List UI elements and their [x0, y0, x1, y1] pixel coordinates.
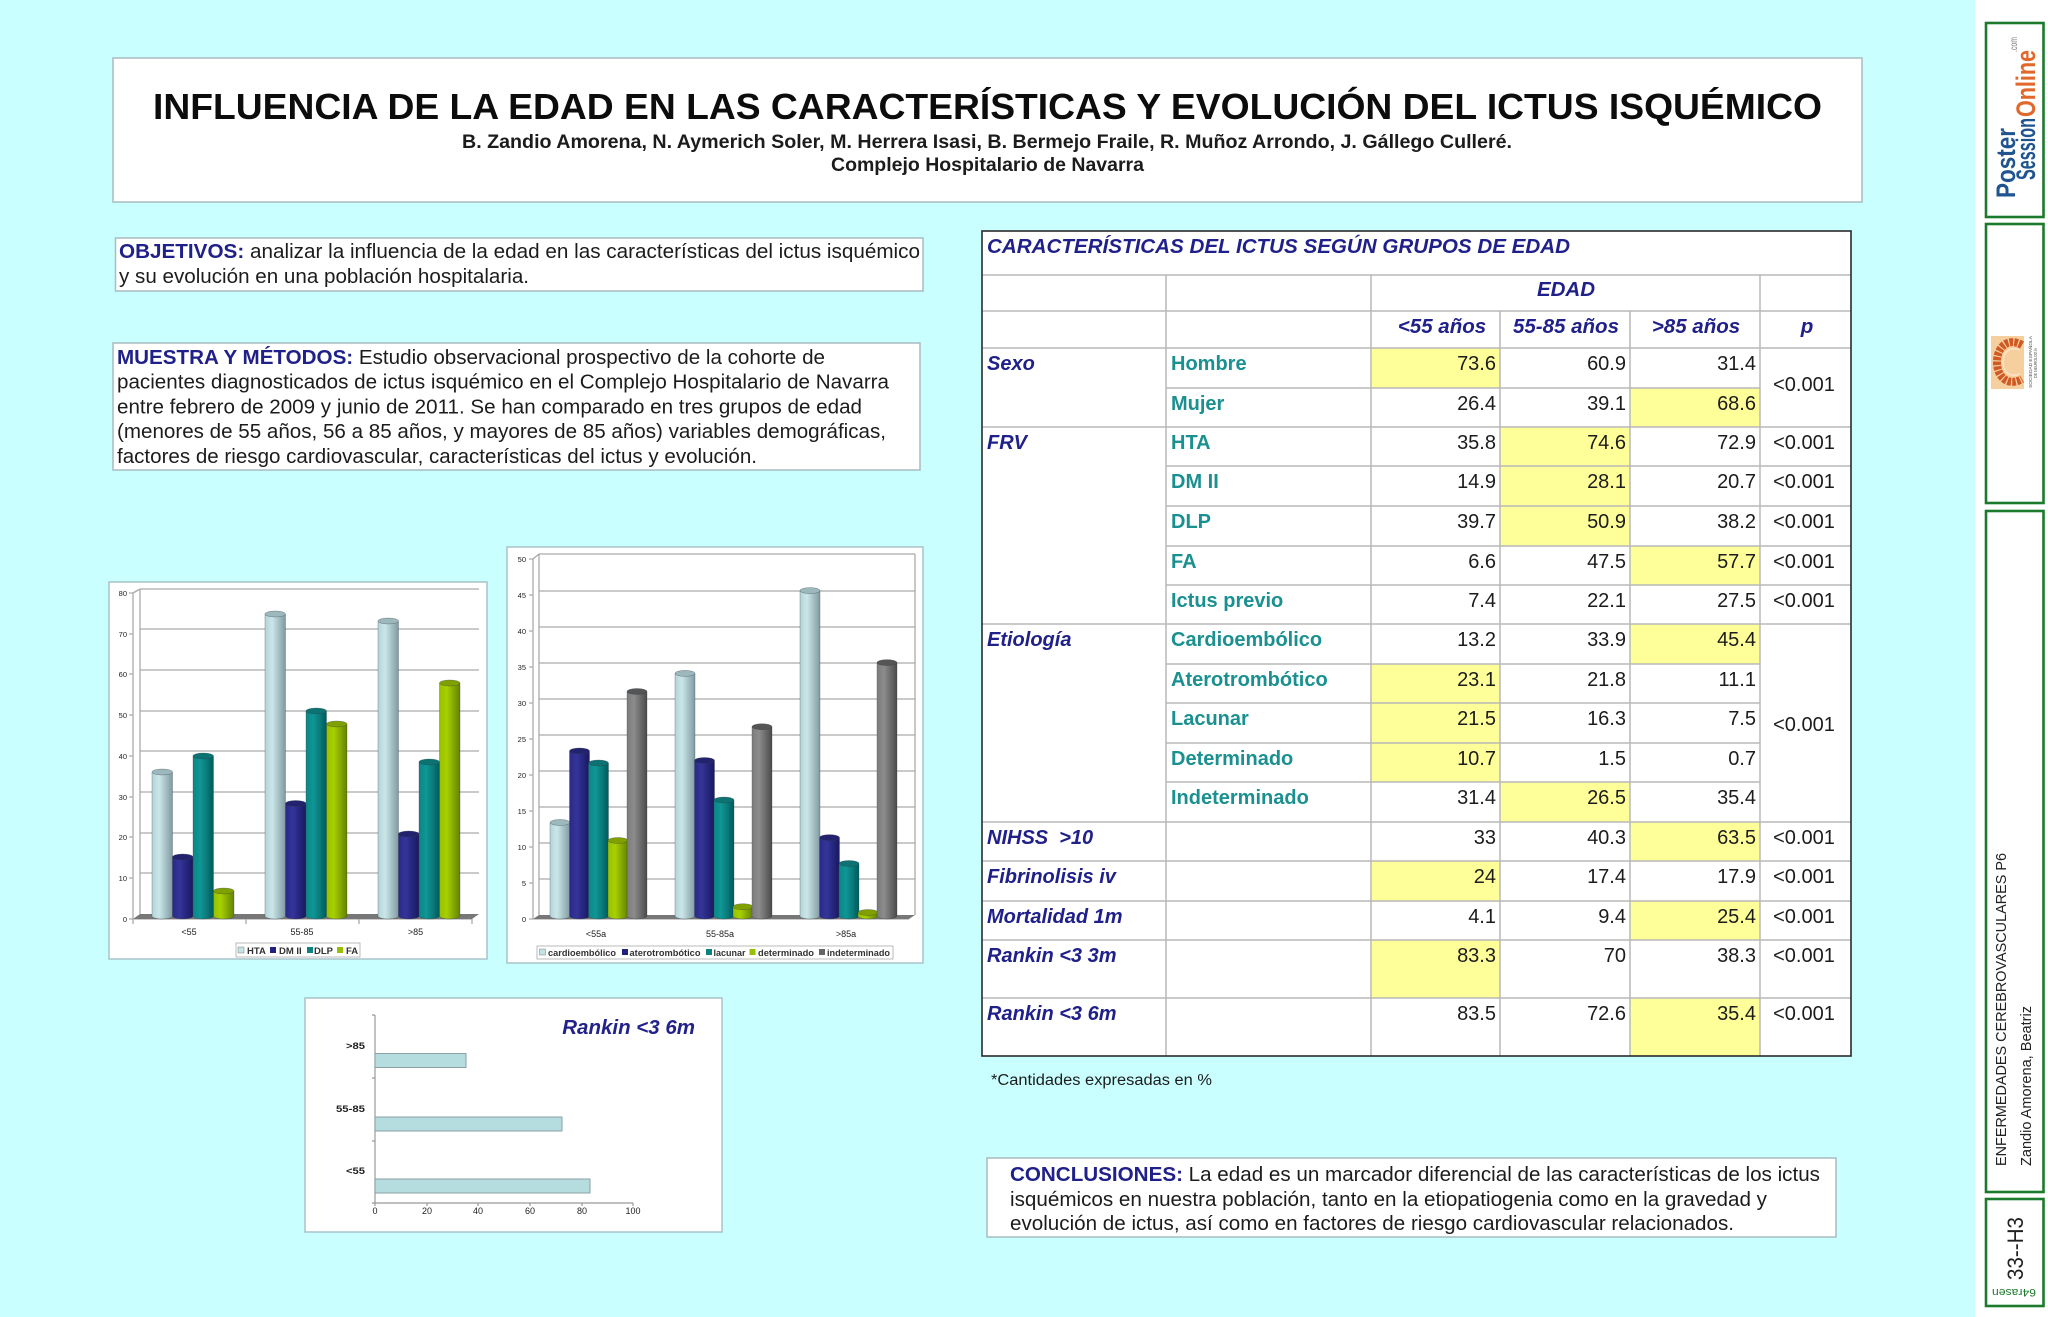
p values: <0.001	[1773, 1003, 1835, 1025]
values <55 años: 21.5	[1457, 708, 1496, 730]
y axis labels: 5	[522, 879, 526, 888]
values >85 años	[1717, 353, 1756, 1025]
bars group >85	[378, 618, 460, 919]
row sub-labels: Determinado	[1171, 748, 1293, 770]
values 55-85 años: 16.3	[1587, 708, 1626, 730]
p values: <0.001	[1773, 432, 1835, 454]
p values: <0.001	[1773, 471, 1835, 493]
legend: lacunar	[714, 948, 746, 959]
panel: muestra y métodos: pacientes diagnosticados de ictus isquémico en el Complejo Hospitalario de Navarra	[117, 370, 890, 394]
values >85 años: 63.5	[1717, 827, 1756, 849]
row sub-labels: HTA	[1171, 432, 1211, 454]
category labels	[336, 1041, 365, 1176]
y axis labels: 20	[119, 833, 127, 842]
table footnote: *Cantidades expresadas en %	[991, 1072, 1212, 1089]
y axis labels: 35	[518, 663, 526, 672]
p values: <0.001	[1773, 827, 1835, 849]
header panel	[113, 58, 1862, 202]
p values: <0.001	[1773, 714, 1835, 736]
category labels: <55a	[586, 929, 606, 939]
category labels: <55	[181, 927, 197, 937]
values 55-85 años: 33.9	[1587, 629, 1626, 651]
chart title: Rankin <3 6m	[562, 1016, 695, 1039]
p values: <0.001	[1773, 866, 1835, 888]
values >85 años: 7.5	[1728, 708, 1756, 730]
values <55 años: 14.9	[1457, 471, 1496, 493]
bars group 55-85a	[675, 670, 772, 919]
values <55 años: 31.4	[1457, 787, 1496, 809]
sidebar box: poster session logo: Session	[2011, 118, 2041, 180]
row sub-labels: DLP	[1171, 511, 1211, 533]
values 55-85 años: 26.5	[1587, 787, 1626, 809]
values <55 años	[1457, 353, 1496, 1025]
column headers: >85 años	[1652, 315, 1740, 338]
y axis labels: 0	[522, 915, 526, 924]
panel: muestra y métodos: MUESTRA Y MÉTODOS: Estudio observacional prospectivo de la cohorte de	[117, 346, 825, 369]
bar chart: Rankin <3 6m	[305, 998, 722, 1232]
column headers: p	[1800, 315, 1813, 338]
sidebar box: session and author	[1986, 511, 2044, 1192]
values <55 años: 23.1	[1457, 669, 1496, 691]
row sub-labels: Aterotrombótico	[1171, 669, 1328, 691]
bar chart: factores de riesgo por edad	[109, 582, 487, 959]
values 55-85 años: 17.4	[1587, 866, 1626, 888]
row group labels: Rankin <3 6m	[987, 1003, 1117, 1025]
sidebar box: poster session logo	[1986, 23, 2044, 217]
values 55-85 años: 39.1	[1587, 393, 1626, 415]
panel: conclusiones: CONCLUSIONES: La edad es un marcador diferencial de las características de los ictus	[1010, 1163, 1820, 1186]
legend: indeterminado	[827, 948, 890, 959]
values >85 años: 11.1	[1719, 669, 1756, 691]
values 55-85 años: 21.8	[1587, 669, 1626, 691]
values 55-85 años	[1587, 353, 1626, 1025]
values >85 años: 38.3	[1717, 945, 1756, 967]
authors: B. Zandio Amorena, N. Aymerich Soler, M. Herrera Isasi, B. Bermejo Fraile, R. Muñoz Arrondo, J. Gállego Culleré.	[462, 132, 1512, 153]
sidebar box: poster code	[1986, 1199, 2044, 1306]
values <55 años: 7.4	[1468, 590, 1496, 612]
y axis labels: 40	[119, 752, 127, 761]
x axis labels: 60	[525, 1206, 535, 1216]
p values: <0.001	[1773, 511, 1835, 533]
column headers: EDAD	[1537, 278, 1595, 301]
values 55-85 años: 72.6	[1587, 1003, 1626, 1025]
row sub-labels: Hombre	[1171, 353, 1247, 375]
panel: objetivos: y su evolución en una población hospitalaria.	[119, 265, 529, 288]
row group labels: Fibrinolisis iv	[987, 866, 1118, 888]
y axis labels	[119, 589, 127, 924]
values >85 años: 38.2	[1717, 511, 1756, 533]
column headers	[1398, 278, 1813, 338]
y axis labels: 10	[518, 843, 526, 852]
bars	[375, 1054, 590, 1193]
row group labels: Rankin <3 3m	[987, 945, 1117, 967]
y axis labels: 30	[119, 793, 127, 802]
panel: muestra y métodos: factores de riesgo cardiovascular, características del ictus y evolución.	[117, 445, 757, 468]
y axis labels: 10	[119, 874, 127, 883]
sidebar box: neurology society logo: DE NEUROLOGÍA	[2033, 348, 2038, 378]
y axis labels: 80	[119, 589, 127, 598]
p values	[1773, 374, 1835, 1025]
values >85 años: 0.7	[1728, 748, 1756, 770]
y axis labels: 60	[119, 670, 127, 679]
values <55 años: 35.8	[1457, 432, 1496, 454]
table title: CARACTERÍSTICAS DEL ICTUS SEGÚN GRUPOS DE EDAD	[987, 234, 1570, 258]
panel: objetivos	[116, 238, 923, 291]
values >85 años: 35.4	[1717, 787, 1756, 809]
panel: objetivos: OBJETIVOS: analizar la influencia de la edad en las características del ictus isquémico	[119, 240, 920, 263]
legend	[537, 946, 893, 959]
highlighted cells	[1371, 348, 1760, 1056]
row sub-labels: Cardioembólico	[1171, 629, 1322, 651]
sidebar box: poster code: 64rasen	[1992, 1286, 2036, 1298]
values 55-85 años: 47.5	[1587, 551, 1626, 573]
row sub-labels: Mujer	[1171, 393, 1225, 415]
panel: conclusiones	[987, 1158, 1836, 1237]
affiliation: Complejo Hospitalario de Navarra	[831, 155, 1144, 176]
values 55-85 años: 22.1	[1587, 590, 1626, 612]
row sub-labels	[1171, 353, 1328, 809]
panel: conclusiones: evolución de ictus, así como en factores de riesgo cardiovascular relacionados.	[1010, 1212, 1734, 1235]
x axis labels: 100	[625, 1206, 641, 1216]
y axis labels: 40	[518, 627, 526, 636]
legend: determinado	[758, 948, 814, 959]
panel: muestra y métodos: (menores de 55 años, 56 a 85 años, y mayores de 85 años) variables demográficas,	[117, 420, 886, 443]
p values: <0.001	[1773, 590, 1835, 612]
values 55-85 años: 28.1	[1587, 471, 1626, 493]
values >85 años: 57.7	[1717, 551, 1756, 573]
values 55-85 años: 50.9	[1587, 511, 1626, 533]
category labels: >85	[346, 1041, 365, 1051]
values <55 años: 24	[1474, 866, 1496, 888]
p values: <0.001	[1773, 551, 1835, 573]
legend: aterotrombótico	[630, 948, 701, 959]
p values: <0.001	[1773, 906, 1835, 928]
legend: DLP	[314, 946, 334, 957]
y axis labels: 45	[518, 591, 526, 600]
values 55-85 años: 9.4	[1598, 906, 1626, 928]
sidebar box: session and author: ENFERMEDADES CEREBROVASCULARES P6	[1994, 853, 2010, 1166]
panel: conclusiones: isquémicos en nuestra población, tanto en la etiopatiogenia como en la gravedad y	[1010, 1188, 1768, 1211]
bars group >85a	[800, 588, 897, 919]
values <55 años: 83.3	[1457, 945, 1496, 967]
panel: muestra y métodos	[113, 343, 920, 470]
bars group 55-85	[265, 611, 347, 919]
legend: cardioembólico	[548, 948, 616, 959]
values >85 años: 25.4	[1717, 906, 1756, 928]
sidebar box: session and author: Zandio Amorena, Beatriz	[2019, 1006, 2035, 1166]
x axis labels: 40	[473, 1206, 483, 1216]
values 55-85 años: 60.9	[1587, 353, 1626, 375]
x axis labels: 0	[372, 1206, 378, 1216]
category labels	[181, 927, 423, 937]
sidebar	[1975, 0, 2048, 1317]
y axis labels	[518, 555, 526, 924]
row sub-labels: FA	[1171, 551, 1197, 573]
category labels: <55	[346, 1166, 365, 1176]
y axis labels: 25	[518, 735, 526, 744]
row group labels: NIHSS >10	[987, 827, 1093, 849]
values >85 años: 20.7	[1717, 471, 1756, 493]
y axis labels: 70	[119, 630, 127, 639]
sidebar box: poster code: 33--H3	[2003, 1217, 2028, 1280]
row group labels: Mortalidad 1m	[987, 906, 1123, 928]
p values: <0.001	[1773, 945, 1835, 967]
y axis labels: 20	[518, 771, 526, 780]
values >85 años: 17.9	[1717, 866, 1756, 888]
legend: DM II	[279, 946, 302, 957]
values >85 años: 35.4	[1717, 1003, 1756, 1025]
legend: FA	[346, 946, 358, 957]
values <55 años: 26.4	[1457, 393, 1496, 415]
bars group <55a	[550, 688, 647, 919]
category labels: >85a	[836, 929, 856, 939]
sidebar box: poster session logo: Online	[2011, 50, 2041, 117]
category labels	[586, 929, 856, 939]
values 55-85 años: 74.6	[1587, 432, 1626, 454]
category labels: 55-85	[290, 927, 314, 937]
values 55-85 años: 1.5	[1598, 748, 1626, 770]
values >85 años: 72.9	[1717, 432, 1756, 454]
values <55 años: 39.7	[1457, 511, 1496, 533]
values <55 años: 83.5	[1457, 1003, 1496, 1025]
row sub-labels: Indeterminado	[1171, 787, 1309, 809]
legend: HTA	[247, 946, 266, 957]
sidebar box: neurology society logo: SOCIEDAD ESPAÑOLA	[2028, 336, 2033, 388]
y axis labels: 50	[119, 711, 127, 720]
values <55 años: 10.7	[1457, 748, 1496, 770]
sidebar box: neurology society logo	[1986, 224, 2044, 503]
table: características del ictus	[982, 231, 1851, 1056]
values <55 años: 73.6	[1457, 353, 1496, 375]
y axis labels: 15	[518, 807, 526, 816]
legend	[236, 943, 360, 957]
values >85 años: 68.6	[1717, 393, 1756, 415]
p values: <0.001	[1773, 374, 1835, 396]
values <55 años: 33	[1474, 827, 1496, 849]
row group labels: Etiología	[987, 629, 1071, 651]
values >85 años: 31.4	[1717, 353, 1756, 375]
values >85 años: 45.4	[1717, 629, 1756, 651]
category labels: 55-85a	[706, 929, 734, 939]
values <55 años: 13.2	[1457, 629, 1496, 651]
row sub-labels: DM II	[1171, 471, 1219, 493]
sidebar box: poster session logo: .com	[2009, 37, 2020, 52]
category labels: 55-85	[336, 1104, 365, 1114]
row group labels: FRV	[987, 432, 1029, 454]
x axis labels: 20	[422, 1206, 432, 1216]
values 55-85 años: 40.3	[1587, 827, 1626, 849]
y axis labels: 30	[518, 699, 526, 708]
row group labels	[987, 353, 1123, 1025]
row group labels: Sexo	[987, 353, 1035, 375]
values 55-85 años: 70	[1604, 945, 1626, 967]
category labels: >85	[408, 927, 423, 937]
row sub-labels: Lacunar	[1171, 708, 1249, 730]
title: INFLUENCIA DE LA EDAD EN LAS CARACTERÍSTICAS Y EVOLUCIÓN DEL ICTUS ISQUÉMICO	[153, 85, 1822, 127]
bars group <55	[152, 753, 234, 919]
x axis labels: 80	[577, 1206, 587, 1216]
row sub-labels: Ictus previo	[1171, 590, 1283, 612]
y axis labels: 50	[518, 555, 526, 564]
values <55 años: 4.1	[1468, 906, 1496, 928]
column headers: <55 años	[1398, 315, 1486, 338]
values >85 años: 27.5	[1717, 590, 1756, 612]
y axis labels: 0	[123, 915, 127, 924]
sidebar box: poster session logo: Poster	[1991, 128, 2021, 198]
bar chart: etiología por edad	[507, 547, 923, 963]
values <55 años: 6.6	[1468, 551, 1496, 573]
x axis labels	[372, 1206, 641, 1216]
panel: muestra y métodos: entre febrero de 2009 y junio de 2011. Se han comparado en tres grupos de edad	[117, 396, 862, 418]
column headers: 55-85 años	[1513, 315, 1619, 338]
